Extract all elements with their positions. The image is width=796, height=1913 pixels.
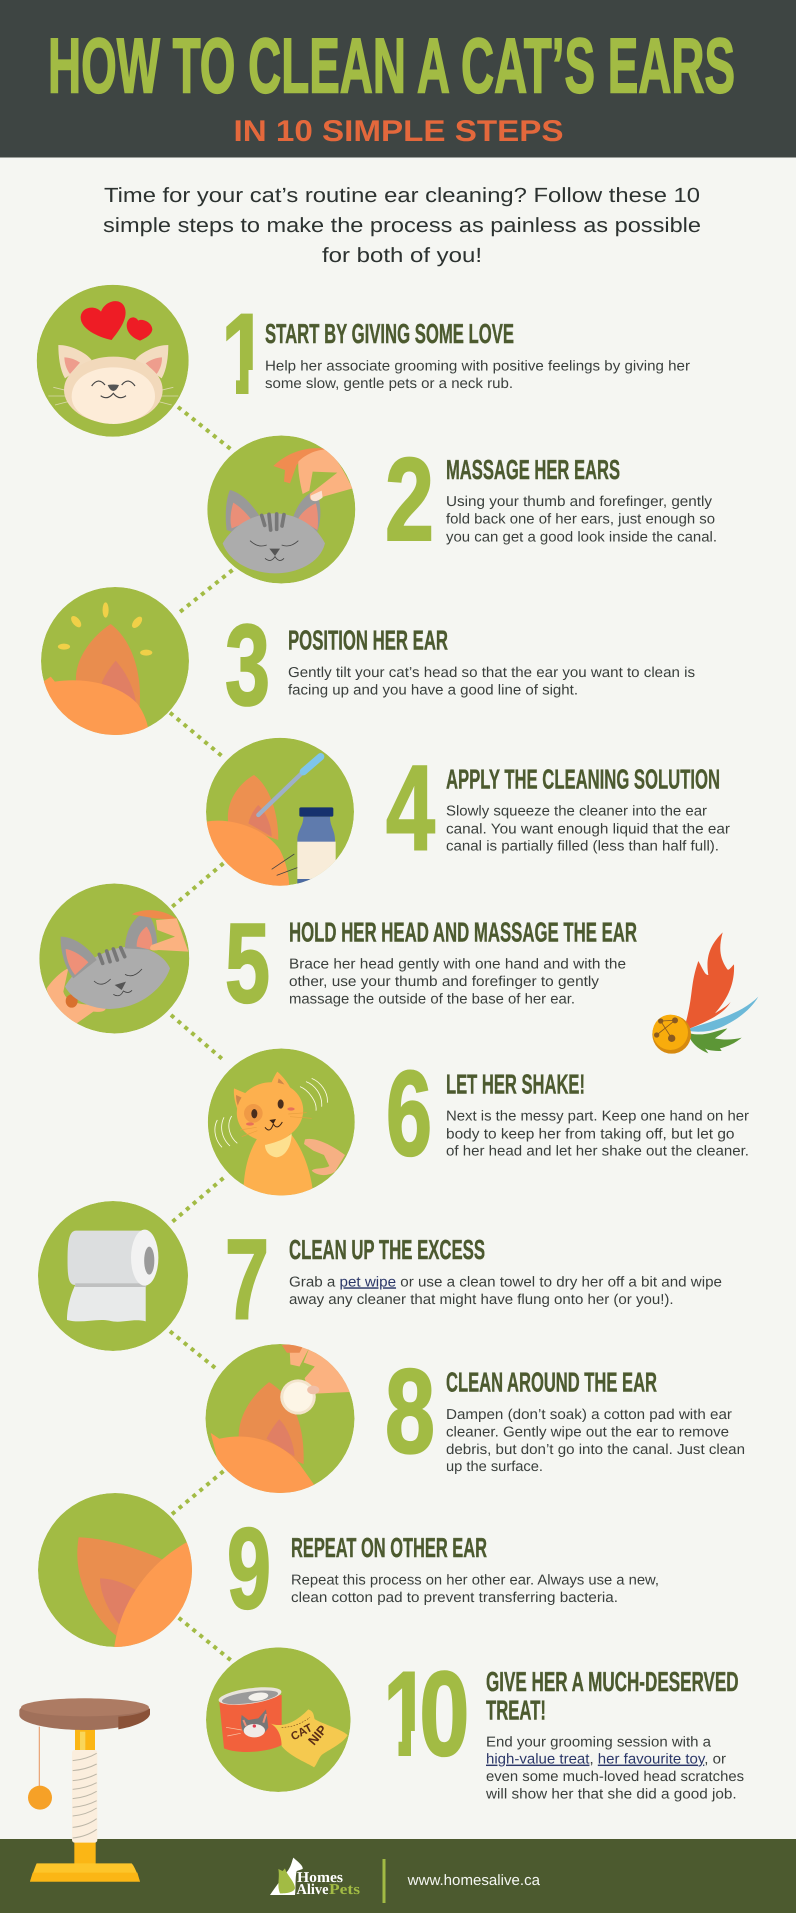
body 5: massage the outside of the base of her ear. [289, 991, 575, 1007]
heading 7: CLEAN UP THE EXCESS [289, 1234, 485, 1265]
body 9: Repeat this process on her other ear. Always use a new, [291, 1573, 659, 1589]
number 10 [388, 1670, 466, 1758]
heading 1: START BY GIVING SOME LOVE [265, 318, 514, 349]
heading 3: POSITION HER EAR [288, 624, 448, 655]
body 8: Dampen (don’t soak) a cotton pad with ear [446, 1407, 732, 1423]
number 8: 8 [385, 1344, 435, 1478]
body 1: Help her associate grooming with positive feelings by giving her [265, 359, 690, 375]
number 9: 9 [227, 1505, 271, 1633]
body 7: Grab a pet wipe or use a clean towel to dry her off a bit and wipe [289, 1274, 722, 1290]
body 3: Gently tilt your cat’s head so that the ear you want to clean is [288, 665, 695, 681]
body 1: some slow, gentle pets or a neck rub. [265, 376, 513, 392]
step 2 [385, 434, 717, 566]
icon: hands holding grey cat head [39, 884, 189, 1034]
body 8: cleaner. Gently wipe out the ear to remove [446, 1424, 729, 1440]
heading 10 [486, 1666, 739, 1726]
body 10: high-value treat , her favourite toy , or [486, 1752, 726, 1768]
body 5: other, use your thumb and forefinger to gently [289, 974, 600, 990]
body 5 [289, 957, 626, 1007]
icon: orange cat shaking [208, 1048, 355, 1197]
body 4: Slowly squeeze the cleaner into the ear [446, 804, 707, 820]
step 4 [386, 740, 730, 876]
body 4: canal is partially filled (less than half full). [446, 839, 719, 855]
icon: dropper and bottle of cleaner [206, 738, 354, 890]
body 8 [446, 1407, 745, 1475]
icon: feather toy with bell [652, 932, 758, 1054]
icon: cat food can and catnip bag [206, 1647, 351, 1792]
step 3 [225, 602, 695, 730]
logo: Homes Alive Pets: Homes [297, 1870, 343, 1886]
heading 10: TREAT! [486, 1694, 546, 1726]
body 10: End your grooming session with a [486, 1734, 711, 1750]
number 10: 0 [419, 1647, 469, 1781]
step 10 [388, 1670, 744, 1802]
body 8: debris, but don’t go into the canal. Just clean [446, 1442, 745, 1458]
number 3: 3 [225, 602, 270, 730]
body 6: Next is the messy part. Keep one hand on her [446, 1109, 749, 1125]
body 9 [291, 1573, 659, 1606]
cat scratching tree illustration [19, 1698, 150, 1882]
body 7 [289, 1274, 722, 1308]
body 10 [485, 1734, 744, 1802]
body 2 [446, 494, 717, 545]
step 7 [225, 1216, 722, 1344]
icon: other ear [38, 1493, 198, 1652]
catnip label: NIP [306, 1723, 330, 1748]
body 6: of her head and let her shake out the cleaner. [446, 1144, 749, 1160]
body 6 [446, 1109, 749, 1160]
heading 8: CLEAN AROUND THE EAR [446, 1366, 657, 1398]
body 6: body to keep her from taking off, but let go [446, 1126, 734, 1142]
catnip label [291, 1723, 324, 1746]
body 8: up the surface. [446, 1459, 543, 1475]
body 4 [446, 804, 730, 855]
body 1 [265, 359, 690, 392]
heading 2: MASSAGE HER EARS [446, 454, 620, 485]
body 10: will show her that she did a good job. [485, 1786, 737, 1802]
number 10: 1 [384, 1647, 430, 1781]
number 5: 5 [225, 900, 270, 1026]
body 10: even some much-loved head scratches [486, 1769, 744, 1785]
number 2: 2 [385, 434, 434, 566]
logo: Homes Alive Pets: Alive [296, 1882, 329, 1898]
body 7: away any cleaner that might have flung onto her (or you!). [289, 1292, 674, 1308]
intro text: Time for your cat’s routine ear cleaning? Follow these 10 [104, 184, 700, 207]
icon: ear facing up [41, 587, 189, 740]
body 2: Using your thumb and forefinger, gently [446, 494, 713, 510]
dotted connectors between steps [170, 407, 233, 1662]
number 4: 4 [386, 740, 435, 876]
icon: cotton pad on ear [206, 1343, 354, 1499]
footer band [0, 1839, 796, 1913]
number 1: 1 [221, 291, 267, 418]
website url: www.homesalive.ca [407, 1872, 541, 1889]
intro text: simple steps to make the process as painless as possible [103, 214, 701, 237]
step 1 [226, 314, 690, 394]
body 4: canal. You want enough liquid that the ear [446, 821, 730, 837]
logo: Homes Alive Pets: Pets [329, 1882, 360, 1898]
header band [0, 0, 796, 158]
step 9 [227, 1505, 659, 1633]
step 6 [386, 1045, 749, 1181]
body 2: you can get a good look inside the canal. [446, 529, 717, 545]
icon: happy cream cat with hearts [37, 285, 189, 437]
logo: Homes Alive Pets [270, 1858, 360, 1898]
body 2: fold back one of her ears, just enough so [446, 512, 715, 528]
body 3 [288, 665, 695, 699]
body 9: clean cotton pad to prevent transferring bacteria. [291, 1590, 618, 1606]
intro text: for both of you! [322, 244, 482, 267]
step 8 [385, 1344, 745, 1478]
icon: hand folding grey cat ear [207, 436, 355, 584]
step 5 [225, 900, 637, 1026]
intro text [103, 184, 701, 267]
footer divider [382, 1859, 386, 1903]
number 6: 6 [386, 1045, 432, 1181]
body 3: facing up and you have a good line of sight. [288, 683, 578, 699]
heading 6: LET HER SHAKE! [446, 1068, 585, 1099]
subtitle: IN 10 SIMPLE STEPS [234, 115, 564, 148]
number 7: 7 [225, 1216, 269, 1344]
heading 9: REPEAT ON OTHER EAR [291, 1532, 487, 1563]
icon: paper towel roll [38, 1201, 188, 1351]
body 5: Brace her head gently with one hand and with the [289, 957, 626, 973]
catnip label: CAT [289, 1721, 314, 1743]
